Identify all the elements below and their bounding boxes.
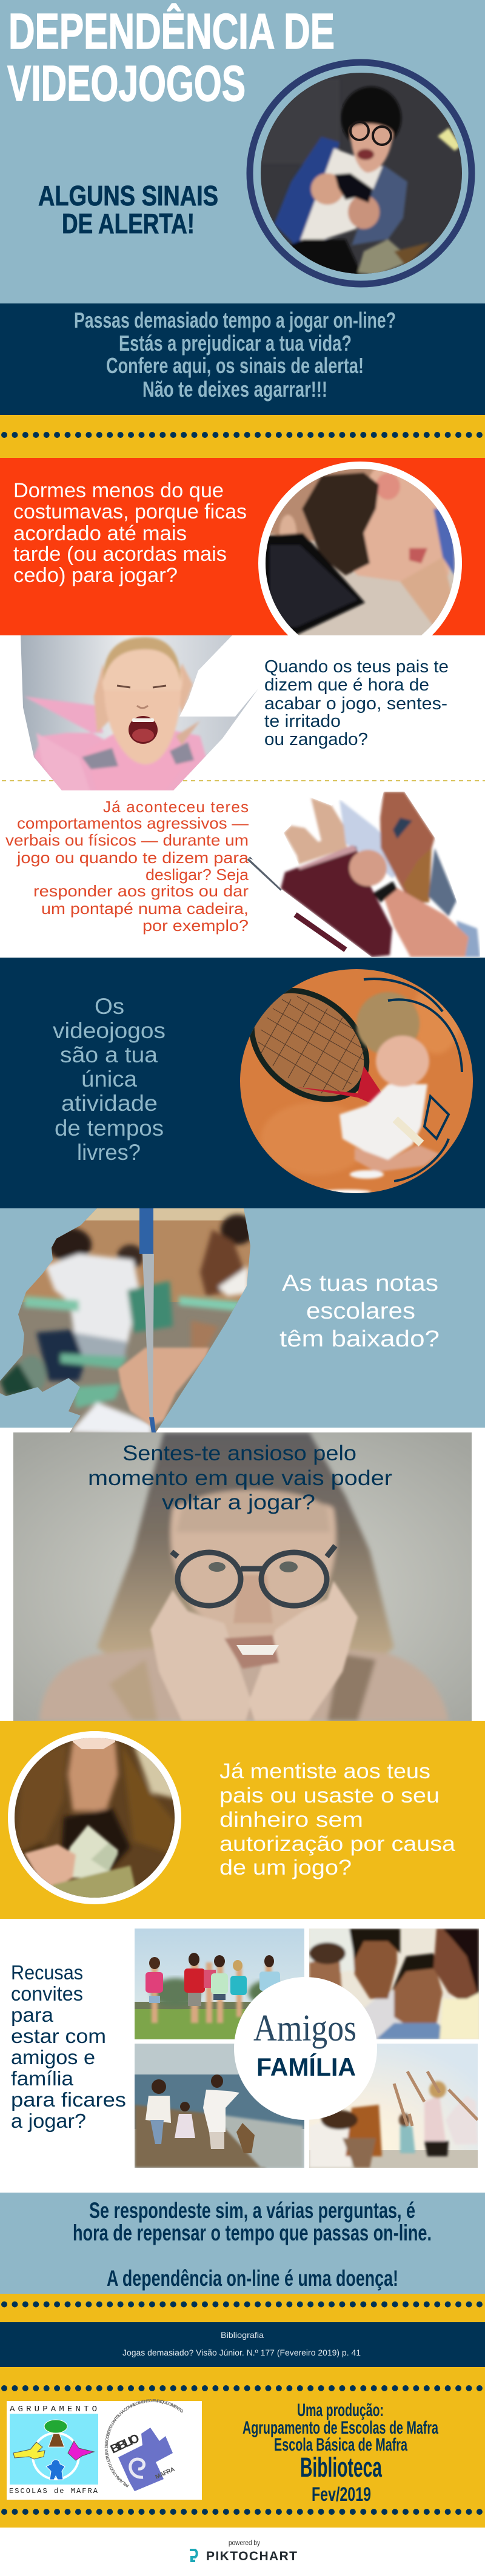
panel: school grades: [0, 1205, 485, 1435]
panel: money lies: [0, 1721, 485, 1919]
logo: Agrupamento de Escolas de Mafra: [9, 2405, 98, 2495]
text: refuse invitations: para: [11, 2004, 54, 2026]
text: lied about money: de um jogo?: [219, 1856, 352, 1879]
panel: friends and family: [11, 1929, 479, 2168]
text: anxious about playing: Sentes-te ansioso pelo: [122, 1442, 356, 1465]
text: only leisure activity: Os: [95, 994, 124, 1019]
photo: student writing in exam: [0, 1205, 255, 1435]
icon: Piktochart logo: [190, 2550, 197, 2561]
text: aggressive behaviour: responder aos gritos ou dar: [33, 882, 249, 900]
sleep text: acordado até mais: [13, 522, 187, 545]
credits text: [242, 2400, 438, 2505]
credits text: Biblioteca: [300, 2452, 383, 2483]
badge: Amigos Família: Amigos: [253, 2008, 356, 2049]
title: VIDEOJOGOS: [7, 55, 246, 111]
sleep text: costumavas, porque ficas: [13, 500, 247, 523]
dotted band: yellow separator: [0, 415, 485, 458]
text: anxious about playing: [88, 1442, 392, 1514]
text: grades fell: escolares: [306, 1299, 415, 1324]
logo: Biblioteca: MAFRA: [155, 2466, 176, 2481]
panel: intro questions: [0, 303, 485, 415]
intro text: Confere aqui, os sinais de alerta!: [106, 353, 364, 378]
text: only leisure activity: videojogos: [53, 1018, 166, 1043]
subtitle: DE ALERTA!: [62, 208, 195, 239]
panel: conclusion: [0, 2193, 485, 2294]
intro text: Não te deixes agarrar!!!: [142, 377, 327, 402]
text: grades fell: As tuas notas: [282, 1271, 438, 1296]
bibliography text: Jogas demasiado? Visão Júnior. N.º 177 (Fevereiro 2019) p. 41: [122, 2348, 361, 2357]
text: lied about money: autorização por causa: [219, 1832, 456, 1856]
text: refuse invitations: Recusas: [11, 1961, 83, 1984]
photo: girl taking money from wallet: [8, 1731, 181, 1904]
photo: woman biting nails: [13, 1432, 472, 1721]
photo: woman playing video game: [250, 62, 472, 284]
footer: Piktochart: [190, 2538, 297, 2563]
intro text: [74, 308, 396, 402]
text: refuse invitations: para ficares: [11, 2088, 126, 2111]
photo: smiling family: [309, 1929, 479, 2039]
credits text: Escola Básica de Mafra: [274, 2435, 407, 2455]
text: refuse invitations: família: [11, 2067, 74, 2090]
panel: white section with boy and fight: [0, 635, 485, 963]
title: [7, 3, 335, 111]
text: parents tell you to stop: dizem que é hora de: [264, 675, 429, 695]
panel: credits: [0, 2367, 485, 2528]
text: only leisure activity: atividade: [61, 1091, 158, 1116]
photo: family on the beach: [135, 2044, 304, 2168]
text: refuse invitations: convites: [11, 1982, 83, 2005]
text: grades fell: têm baixado?: [279, 1326, 440, 1352]
credits text: Fev/2019: [312, 2483, 371, 2505]
text: only leisure activity: única: [81, 1067, 137, 1091]
logo: Agrupamento de Escolas de Mafra: ESCOLAS de MAFRA: [9, 2487, 98, 2495]
text: lied about money: [219, 1760, 456, 1879]
text: refuse invitations: a jogar?: [11, 2110, 86, 2132]
bibliography text: Bibliografia: [221, 2330, 264, 2340]
text: only leisure activity: de tempos: [55, 1116, 164, 1141]
sleep text: tarde (ou acordas mais: [13, 543, 227, 566]
text: refuse invitations: [11, 1961, 126, 2132]
sleep text: Dormes menos do que: [13, 479, 224, 502]
text: lied about money: pais ou usaste o seu: [219, 1784, 440, 1807]
photo: two men fighting: [242, 787, 485, 963]
footer: Piktochart: powered by: [229, 2538, 260, 2547]
text: anxious about playing: voltar a jogar?: [162, 1491, 315, 1514]
text: parents tell you to stop: acabar o jogo, sentes-: [264, 694, 447, 714]
logo: Biblioteca: PALAVRA TEXTO LEITURA DESCOBERTA PARTILHA CONHECIMENTO ENRIQUECIMENTO.: [104, 2399, 183, 2488]
photo: boy asleep on tablet: [258, 462, 462, 635]
text: aggressive behaviour: Já aconteceu teres: [103, 798, 249, 816]
text: parents tell you to stop: ou zangado?: [264, 730, 368, 749]
text: aggressive behaviour: [5, 798, 249, 935]
title: DEPENDÊNCIA DE: [8, 3, 335, 59]
panel: free time: [0, 958, 485, 1208]
text: parents tell you to stop: Quando os teus pais te: [264, 657, 449, 677]
badge: Amigos Família: FAMÍLIA: [256, 2053, 356, 2081]
photo: friends on sunset beach: [309, 2044, 478, 2168]
credits text: Uma produção:: [297, 2400, 384, 2420]
panel: sleep: [0, 458, 485, 635]
text: refuse invitations: estar com: [11, 2025, 106, 2047]
intro text: Estás a prejudicar a tua vida?: [119, 331, 352, 356]
panel: anxious woman: [13, 1432, 472, 1721]
text: refuse invitations: amigos e: [11, 2046, 95, 2068]
text: lied about money: dinheiro sem: [219, 1808, 363, 1832]
subtitle: [38, 180, 218, 239]
text: aggressive behaviour: por exemplo?: [142, 916, 249, 935]
conclusion text: [73, 2198, 432, 2291]
photo: children running: [135, 1929, 304, 2039]
panel: header: [0, 0, 485, 303]
text: aggressive behaviour: comportamentos agressivos —: [17, 814, 249, 832]
text: aggressive behaviour: um pontapé numa cadeira,: [41, 899, 249, 918]
text: only leisure activity: livres?: [77, 1140, 141, 1165]
text: aggressive behaviour: verbais ou físicos — durante um: [5, 831, 249, 849]
photo: tennis player: [240, 969, 473, 1193]
text: only leisure activity: [53, 994, 166, 1165]
text: lied about money: Já mentiste aos teus: [219, 1760, 430, 1783]
logo: Agrupamento de Escolas de Mafra: AGRUPAMENTO: [10, 2405, 97, 2414]
text: grades fell: [279, 1271, 440, 1352]
sleep text: cedo) para jogar?: [13, 564, 178, 587]
photo: screaming boy: [18, 635, 261, 793]
text: anxious about playing: momento em que vais poder: [88, 1466, 392, 1490]
footer: Piktochart: PIKTOCHART: [206, 2549, 297, 2563]
sleep text: [13, 479, 247, 587]
logos: [7, 2399, 202, 2500]
text: only leisure activity: são a tua: [60, 1042, 158, 1067]
panel: bibliography: [0, 2322, 485, 2367]
text: aggressive behaviour: jogo ou quando te dizem para: [16, 849, 249, 867]
bibliography text: [122, 2330, 361, 2357]
dotted band: yellow separator 2: [0, 2294, 485, 2322]
badge: Amigos Família: [234, 1977, 377, 2120]
text: parents tell you to stop: te irritado: [264, 712, 341, 731]
logo: Biblioteca: BIBLIO: [109, 2431, 141, 2457]
subtitle: ALGUNS SINAIS: [38, 180, 218, 211]
text: parents tell you to stop: [264, 657, 449, 749]
text: aggressive behaviour: desligar? Seja: [146, 866, 249, 884]
